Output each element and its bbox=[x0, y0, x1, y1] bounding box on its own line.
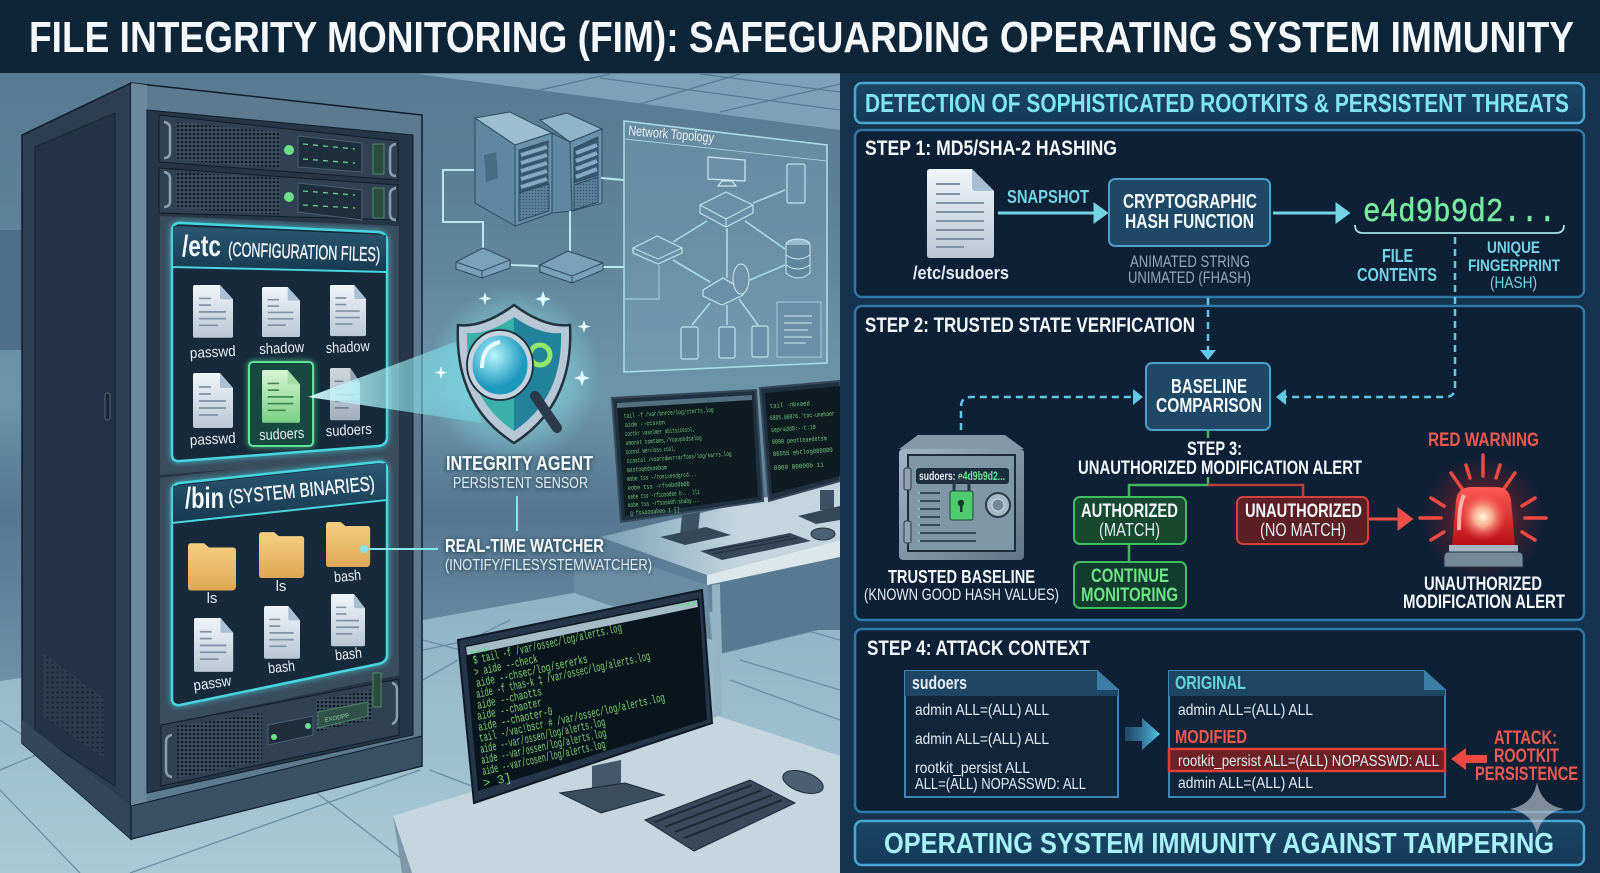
panel: sudoers file: admin ALL=(ALL) ALL bbox=[915, 731, 1049, 748]
panel: step 1 hashing: FINGERPRINT bbox=[1468, 256, 1560, 275]
panel: step 1 hashing: /etc/sudoers bbox=[913, 263, 1009, 283]
icon: switches bbox=[456, 248, 603, 283]
icon: terminal monitor: $ tail -f /var/ossec/log/alerts.log bbox=[472, 621, 623, 668]
arrow: baseline safe to comparison bbox=[961, 389, 1143, 430]
box: baseline comparison bbox=[1146, 363, 1270, 430]
back desk with monitors bbox=[600, 381, 840, 720]
icon: terminal monitor: aide --var/ossen/log/alerts.log bbox=[479, 716, 607, 757]
icon: file shadow 2: shadow bbox=[325, 338, 370, 357]
panel: sudoers file bbox=[905, 671, 1118, 797]
box: cryptographic hash function: CRYPTOGRAPHIC bbox=[1123, 191, 1257, 213]
icon: back monitor 2: 0000 peotteaedetsm bbox=[772, 435, 827, 446]
beam from sudoers to agent bbox=[308, 342, 482, 423]
icon: folder ls: ls bbox=[207, 590, 217, 607]
arrow: fingerprint to comparison bbox=[1276, 237, 1455, 405]
panel: step 2 verification: RED WARNING bbox=[1428, 430, 1539, 451]
icon: file bash 2 bbox=[331, 594, 365, 664]
icon: tower servers bbox=[475, 112, 602, 226]
icon: terminal monitor: aide --chaoter bbox=[476, 696, 543, 724]
box: unauthorized bbox=[1237, 497, 1368, 544]
icon: file bash 2: bash bbox=[334, 645, 363, 664]
heading: step 3 bbox=[1078, 439, 1362, 479]
icon: file passwd bbox=[189, 285, 236, 362]
icon: file shadow bbox=[259, 287, 305, 358]
panel: step 4 attack context bbox=[855, 629, 1584, 812]
icon: terminal monitor bbox=[458, 590, 712, 813]
icon: trusted baseline safe bbox=[899, 435, 1024, 560]
agent labels: INTEGRITY AGENT bbox=[446, 453, 593, 475]
panel: original vs modified: ORIGINAL bbox=[1175, 673, 1246, 693]
icon: document bbox=[927, 169, 994, 258]
box: cryptographic hash function: HASH FUNCTION bbox=[1125, 211, 1254, 233]
icon: magnifier bbox=[467, 330, 557, 428]
box: baseline comparison: COMPARISON bbox=[1156, 395, 1262, 417]
icon: terminal monitor: > aide --check bbox=[473, 652, 539, 680]
icon: red siren bbox=[1420, 455, 1546, 580]
watcher label: (INOTIFY/FILESYSTEMWATCHER) bbox=[445, 557, 652, 574]
box: authorized bbox=[1074, 497, 1186, 544]
watcher label: REAL-TIME WATCHER bbox=[445, 536, 604, 556]
icon: back monitor 1: eebe tss -rfiosodee b... ll1 bbox=[628, 489, 700, 501]
icon: file passw: passw bbox=[192, 672, 233, 695]
icon: terminal monitor: tail -/vac!bscr # /var/ossec/log/alerts.log bbox=[478, 691, 666, 746]
panel: /etc configuration files: (CONFIGURATION FILES) bbox=[228, 239, 381, 266]
panel: original vs modified: rootkit_persist ALL=(ALL) NOPASSWD: ALL bbox=[1178, 753, 1439, 770]
panel: step 4 attack context: STEP 4: ATTACK CONTEXT bbox=[867, 637, 1090, 660]
icon: back monitor 1 bbox=[612, 390, 763, 545]
icon: back monitor 1: eobe tss -rfsoso0h:sbaby... bbox=[628, 497, 700, 509]
panel: step 1 hashing: ANIMATED STRING bbox=[1130, 252, 1250, 271]
rack front frame bbox=[131, 83, 422, 839]
panel: /bin system binaries: (SYSTEM BINARIES) bbox=[227, 473, 376, 509]
panel: right dark background bbox=[840, 73, 1600, 873]
front desk bbox=[393, 590, 840, 873]
icon: folder ls bbox=[188, 543, 236, 607]
panel: original vs modified: MODIFIED bbox=[1175, 727, 1247, 747]
server unit 1 bbox=[159, 115, 398, 180]
icon: file shadow 2 bbox=[325, 285, 370, 357]
icon: file passwd 2: passwd bbox=[189, 430, 236, 449]
icon: back monitor 1: coctkr vasnlmer obitsicecol, bbox=[625, 426, 695, 438]
icon: back monitor 1: g-fosoooaheo 1 [] bbox=[630, 507, 680, 517]
server unit 3: EXODPP bbox=[324, 713, 350, 724]
icon: back monitor 2: 6885.00876.'toc-unehaer bbox=[770, 410, 835, 422]
box: cryptographic hash function bbox=[1109, 179, 1270, 246]
brace bbox=[1355, 225, 1564, 233]
icon: file passw bbox=[192, 618, 233, 695]
icon: file sudoers bbox=[325, 368, 372, 440]
panel: step 1 hashing: UNIQUE bbox=[1487, 238, 1540, 257]
callout: attack rootkit persistence: ATTACK: bbox=[1494, 728, 1557, 749]
panel: original vs modified: admin ALL=(ALL) ALL bbox=[1178, 775, 1313, 792]
box: baseline comparison: BASELINE bbox=[1171, 376, 1247, 398]
panel: step 1 hashing bbox=[855, 130, 1584, 297]
icon: file passwd 2 bbox=[189, 373, 236, 449]
icon: highlighted sudoers file bbox=[249, 362, 313, 446]
icon: terminal monitor: aide --var/cosen/log/alerts.log bbox=[481, 738, 607, 779]
banner: operating system immunity bbox=[855, 821, 1584, 865]
box: continue monitoring: MONITORING bbox=[1081, 585, 1178, 606]
panel: step 2 verification: STEP 2: TRUSTED STATE VERIFICATION bbox=[865, 314, 1195, 337]
icon: terminal monitor: aide --var/ossen/log/alerts.log bbox=[480, 727, 608, 768]
agent labels bbox=[446, 453, 593, 492]
icon: terminal monitor: aide --chaoter-0 bbox=[477, 705, 554, 735]
arrow: hash to fingerprint bbox=[1273, 205, 1348, 221]
icon: back monitor 1: eobe tss -rfsebo0b0b bbox=[628, 481, 690, 492]
box: authorized: (MATCH) bbox=[1099, 520, 1160, 540]
panel: network topology: Network Topology bbox=[628, 122, 715, 145]
connector lines bbox=[443, 170, 624, 267]
icon: back monitor 2: tail -nbxaed bbox=[770, 400, 810, 410]
panel: step 1 hashing: UNIMATED (FHASH) bbox=[1128, 268, 1251, 287]
icon: back monitor 1: cocnst Wervless cool, bbox=[626, 446, 676, 456]
icon: corner sparkle bbox=[1510, 782, 1564, 835]
box: unauthorized: UNAUTHORIZED bbox=[1245, 501, 1362, 522]
real-time watcher connector bbox=[360, 496, 517, 553]
icon: back monitor 2: 0000 00000b 11 bbox=[774, 462, 824, 472]
panel: step 1 hashing: e4d9b9d2... bbox=[1363, 194, 1556, 231]
panel: step 1 hashing: (HASH) bbox=[1490, 273, 1537, 292]
branch connectors bbox=[1129, 430, 1303, 562]
box: unauthorized: (NO MATCH) bbox=[1260, 520, 1346, 540]
panel: step 1 hashing: SNAPSHOT bbox=[1007, 187, 1089, 207]
icon: back monitor 2: 00555 ebtlog000000 bbox=[773, 447, 833, 458]
panel: step 2 verification: UNAUTHORIZED bbox=[1424, 574, 1542, 595]
icon: terminal monitor: > 3] bbox=[482, 771, 513, 791]
panel: sudoers file: sudoers bbox=[912, 673, 967, 693]
server rack bbox=[22, 83, 422, 839]
arrow: to red alert bbox=[1369, 510, 1411, 528]
arrow: original to modified bbox=[1125, 718, 1160, 750]
panel: /bin system binaries bbox=[160, 450, 399, 725]
server unit 2 bbox=[159, 168, 398, 220]
icon: terminal monitor: aide --chaotts bbox=[476, 685, 543, 713]
icon: file sudoers: sudoers bbox=[325, 421, 372, 440]
panel: sudoers file: ALL=(ALL) NOPASSWD: ALL bbox=[915, 776, 1086, 793]
icon: back keyboard and mouse bbox=[700, 528, 835, 560]
callout: attack rootkit persistence: ROOTKIT bbox=[1494, 746, 1559, 767]
panel: original vs modified bbox=[1169, 671, 1445, 797]
panel: /etc configuration files: /etc bbox=[182, 230, 221, 263]
icon: folder bash bbox=[326, 522, 370, 586]
rack side panel bbox=[22, 83, 131, 839]
icon: back monitor 1: tail -f /var/bnrce/log/cterts.log bbox=[624, 407, 714, 420]
icon: back monitor 1: amonst comtoms,/Yoavpodsalog bbox=[626, 435, 702, 447]
icon: folder ls 2: ls bbox=[276, 578, 286, 595]
box: authorized: AUTHORIZED bbox=[1081, 501, 1178, 522]
integrity agent shield bbox=[426, 287, 602, 463]
network diagram on wall bbox=[443, 112, 827, 372]
icon: back monitor 1: mastoqedsnebam bbox=[627, 464, 667, 474]
icon: highlighted sudoers file: sudoers bbox=[259, 425, 305, 444]
icon: keyboard bbox=[645, 780, 795, 851]
arrow: snapshot to hash bbox=[998, 205, 1106, 221]
panel: /etc configuration files bbox=[160, 216, 399, 475]
panel: step 1 hashing: FILE bbox=[1382, 246, 1413, 266]
box: continue monitoring bbox=[1074, 562, 1186, 608]
heading: step 3: UNAUTHORIZED MODIFICATION ALERT bbox=[1078, 458, 1362, 479]
icon: back monitor 1: ccastal /voarcdwvrrarfoos/log/sarrs.log bbox=[627, 451, 732, 465]
panel: /bin system binaries: /bin bbox=[185, 482, 224, 515]
icon: back monitor 1: aide --ccsxon bbox=[625, 419, 665, 429]
arrow: attack pointer bbox=[1451, 748, 1487, 770]
icon: folder ls 2 bbox=[259, 532, 304, 595]
icon: file shadow: shadow bbox=[259, 339, 305, 358]
panel: step 2 verification: TRUSTED BASELINE bbox=[888, 567, 1035, 587]
icon: mouse bbox=[780, 766, 826, 798]
icon: back monitor 2 bbox=[760, 381, 840, 524]
panel: sudoers file: rootkit_persist ALL bbox=[915, 760, 1030, 777]
icon: terminal monitor: aide --chsec/log/sererks bbox=[475, 653, 589, 691]
panel: step 1 hashing: STEP 1: MD5/SHA-2 HASHING bbox=[865, 137, 1117, 160]
panel: step 1 hashing: CONTENTS bbox=[1357, 265, 1437, 285]
panel: network topology bbox=[624, 121, 827, 372]
icon: file bash: bash bbox=[267, 658, 296, 677]
icon: file passwd: passwd bbox=[189, 343, 236, 362]
arrow: hash down to comparison (step 1) bbox=[1200, 298, 1216, 360]
title bar bbox=[0, 0, 1600, 73]
icon: file bash bbox=[264, 606, 300, 677]
server unit 3 bbox=[161, 673, 399, 786]
heading: step 3: STEP 3: bbox=[1187, 439, 1242, 460]
panel: sudoers file: admin ALL=(ALL) ALL bbox=[915, 702, 1049, 719]
callout: attack rootkit persistence bbox=[1475, 728, 1578, 785]
panel: step 2 verification bbox=[855, 306, 1584, 620]
box: continue monitoring: CONTINUE bbox=[1091, 566, 1169, 587]
icon: trusted baseline safe: sudoers: e4d9b9d2... bbox=[919, 471, 1005, 483]
watcher label bbox=[445, 536, 652, 574]
scene: server room background bbox=[0, 73, 840, 873]
panel: step 2 verification: (KNOWN GOOD HASH VALUES) bbox=[864, 585, 1059, 604]
icon: folder bash: bash bbox=[333, 567, 362, 586]
panel: original vs modified: admin ALL=(ALL) ALL bbox=[1178, 702, 1313, 719]
icon: terminal monitor: aide -f thas-k ‡ /var/ossec/log/alerts.log bbox=[475, 650, 652, 702]
agent labels: PERSISTENT SENSOR bbox=[453, 475, 588, 492]
icon: back monitor 1: mobe tss -/ronixendgrcd... bbox=[627, 471, 697, 483]
icon: back monitor 2: sepradd0:--t:10 bbox=[771, 424, 816, 434]
